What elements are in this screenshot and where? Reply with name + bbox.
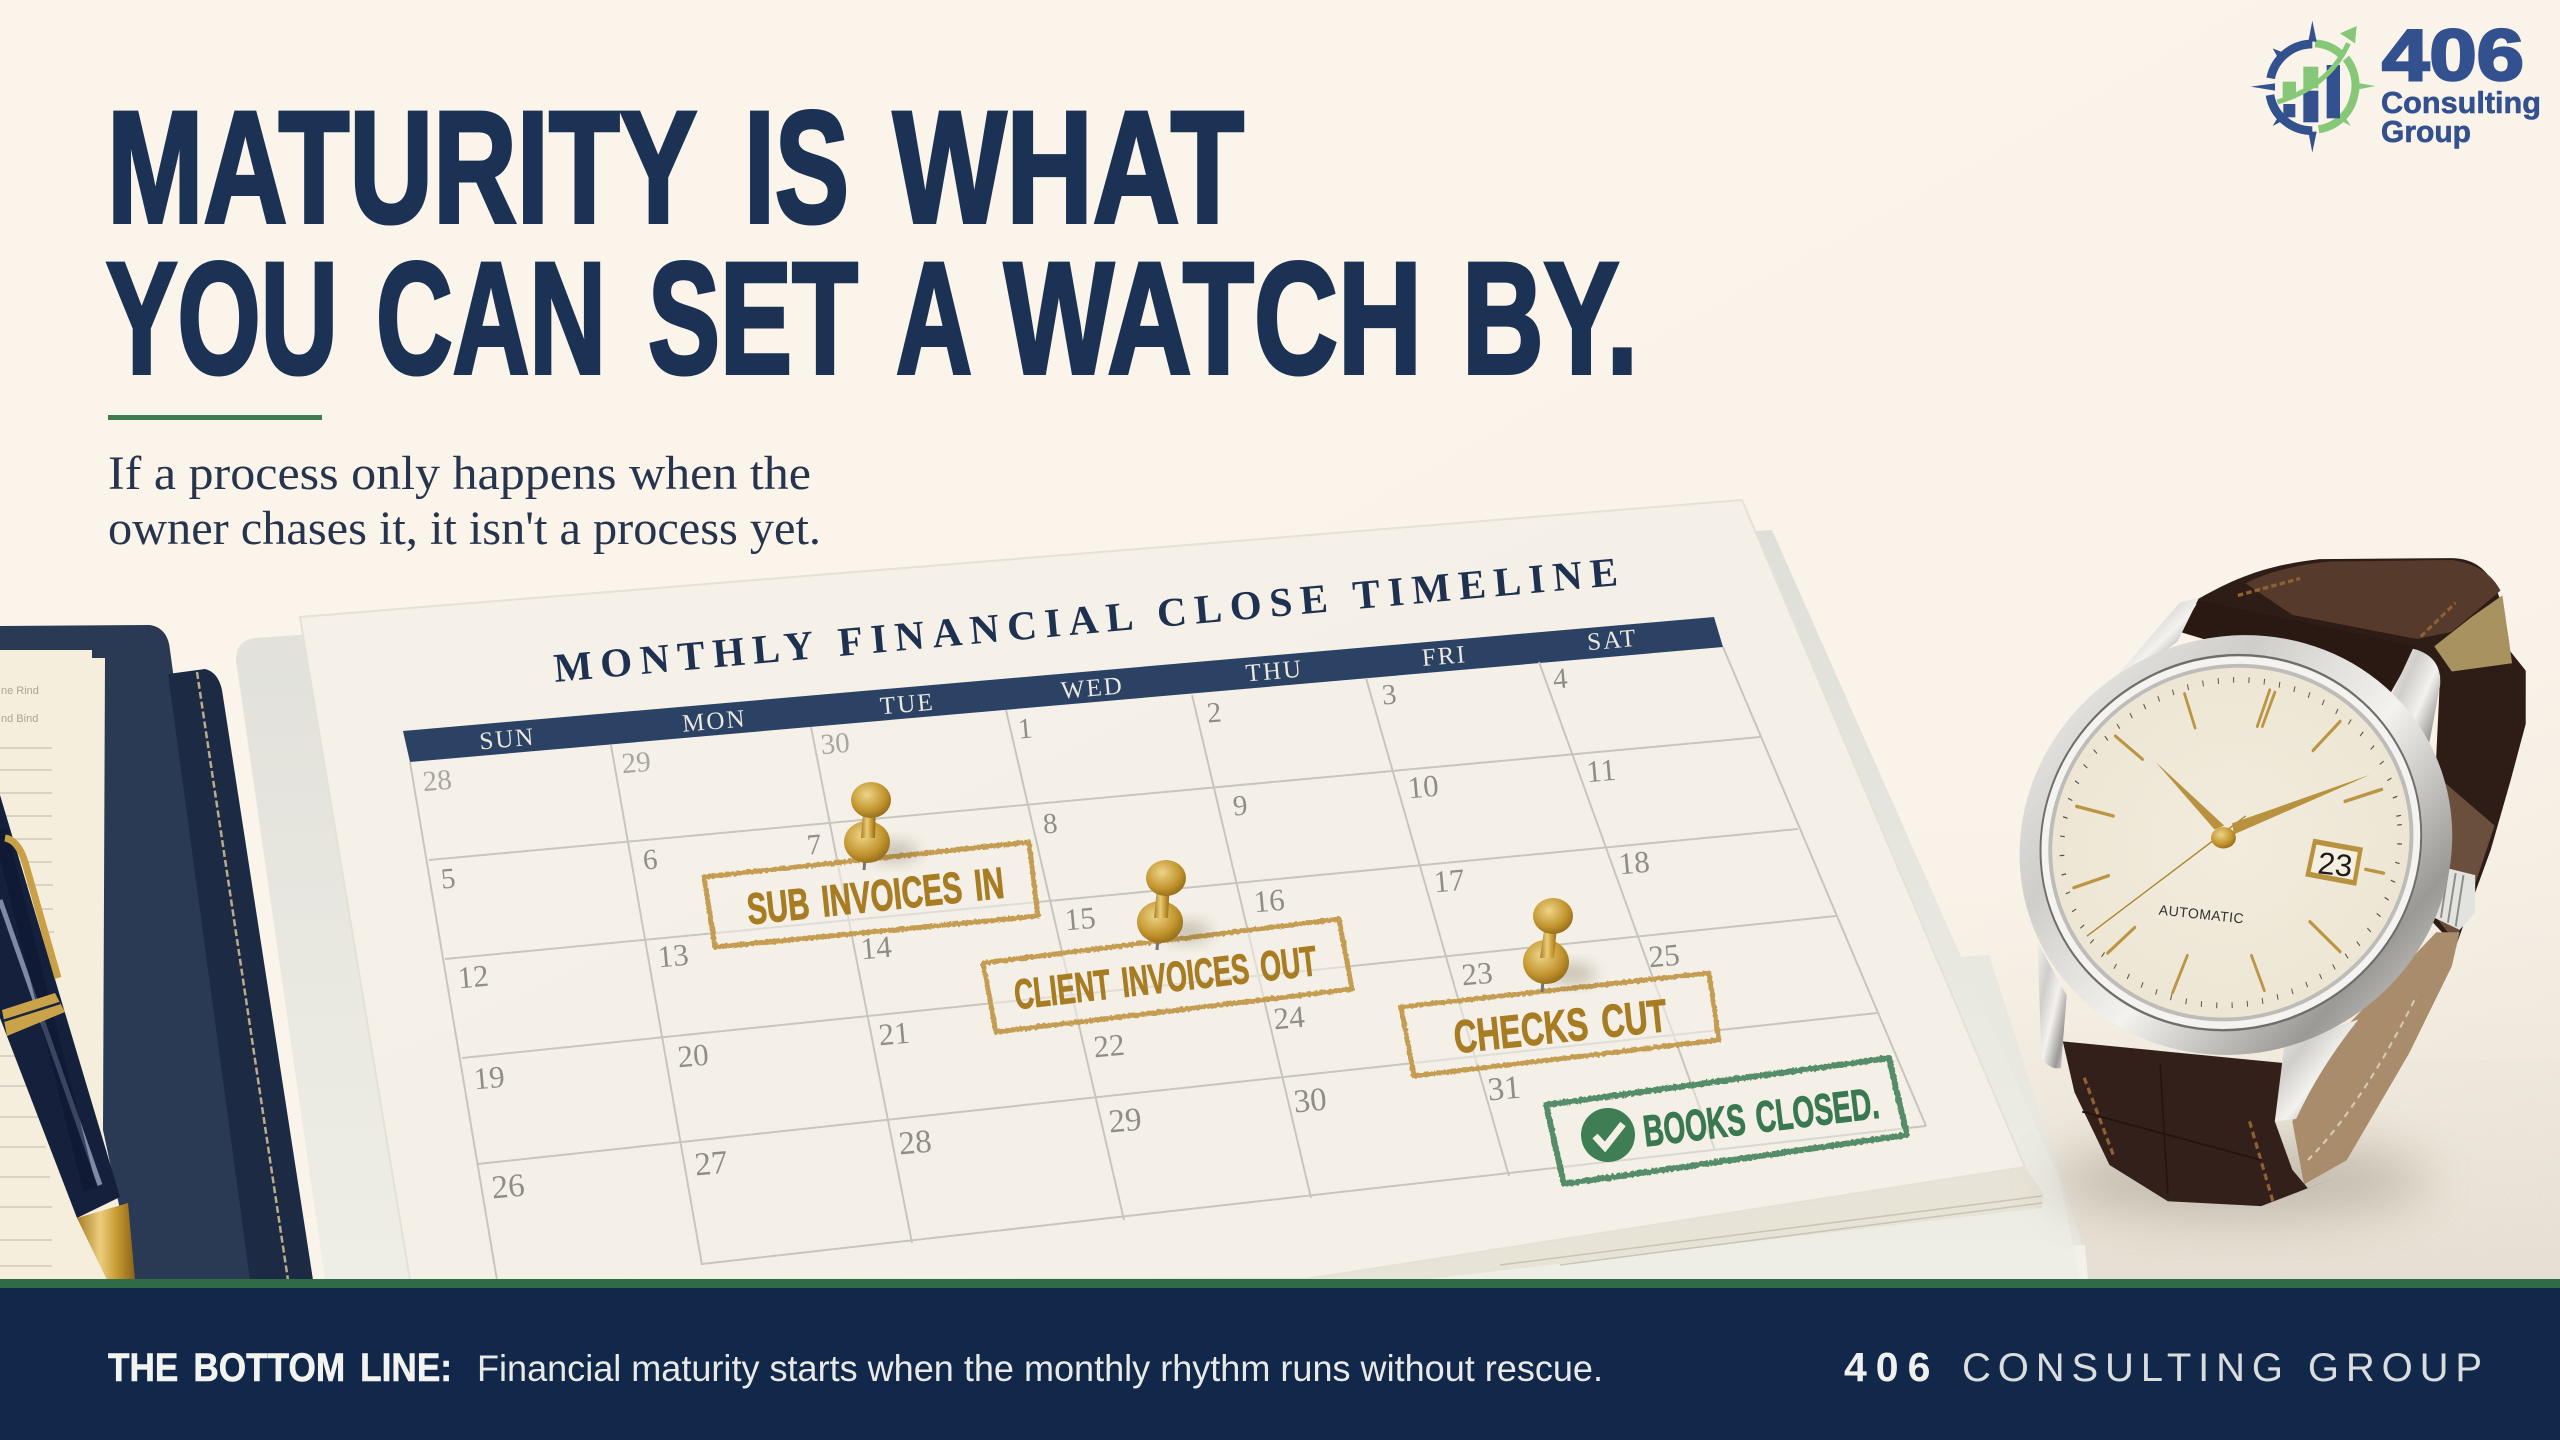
stamp: books closed: BOOKS CLOSED. [1641,1079,1882,1156]
brand footer: 406 [1844,1344,1939,1390]
calendar dates: 4 [1552,662,1569,696]
calendar dates: 31 [1486,1070,1522,1108]
note paper [0,650,135,1280]
logo wordmark: 406 [2382,16,2524,96]
weekday labels: WED [1060,672,1125,705]
watch shadow [2050,1140,2430,1220]
calendar dates: 17 [1432,862,1466,899]
note paper: ne Rind [1,685,39,697]
hour hand [2155,762,2224,830]
notebook cover [0,625,255,1280]
weekday labels: MON [681,705,748,738]
stamp: client invoices out: CLIENT INVOICES OUT [1012,937,1319,1018]
crown [2434,867,2475,930]
calendar dates [421,662,1681,1206]
calendar dates: 3 [1381,678,1398,712]
calendar dates: 10 [1406,768,1440,805]
logo wordmark [2381,16,2541,149]
logo: 406 Consulting Group [2251,16,2541,153]
calendar dates: 16 [1252,882,1286,919]
calendar dates: 24 [1272,999,1307,1036]
calendar dates: 28 [421,764,453,798]
accent rule [108,415,322,420]
subtitle: owner chases it, it isn't a process yet. [108,502,821,555]
weekday labels: TUE [879,689,936,720]
subtitle [108,447,821,555]
calendar dates: 12 [456,958,490,995]
calendar dates: 6 [642,843,659,877]
minute hand [2232,775,2370,834]
calendar dates: 27 [693,1145,729,1183]
calendar sheet [300,500,2025,1280]
hour markers [2074,690,2384,993]
title: SET [648,229,858,407]
calendar dates: 29 [620,746,652,780]
calendar dates: 19 [472,1059,506,1096]
upper strap [2180,558,2526,947]
calendar dates: 23 [1460,955,1494,992]
logo wordmark: Consulting [2381,85,2541,120]
calendar dates: 11 [1585,752,1617,789]
under stack [1300,955,2085,1280]
logo wordmark: Group [2381,114,2471,149]
second hand [2087,816,2246,936]
calendar dates: 26 [490,1168,526,1206]
lower strap [2063,932,2460,1206]
hub [2211,827,2236,848]
brand footer: CONSULTING GROUP [1962,1346,2482,1390]
notebook with pen [0,625,313,1280]
bottom line statement: Financial maturity starts when the monthly rhythm runs without rescue. [477,1348,1603,1389]
weekday labels: SUN [478,724,536,755]
icon: compass with bars and arrow [2251,21,2376,153]
date window [2308,842,2360,883]
lugs [2117,598,2199,675]
calendar dates: 15 [1063,900,1097,937]
table surface [1900,800,2560,1280]
bottom band [0,1279,2560,1440]
stamp: client invoices out [983,919,1352,1032]
calendar dates: 20 [676,1037,710,1074]
stamp: checks cut [1401,973,1719,1076]
calendar dates: 22 [1092,1027,1126,1064]
weekday labels: THU [1245,656,1304,687]
title: MATURITY [107,78,697,256]
calendar dates: 28 [897,1124,933,1162]
calendar dates: 13 [656,937,690,974]
watch body [2005,558,2526,1206]
subtitle: If a process only happens when the [108,447,811,500]
notebook spine strip [168,669,313,1280]
stamp: sub invoices in: SUB INVOICES IN [745,859,1006,934]
pen [0,795,135,1280]
calendar pad [236,500,2088,1280]
stamp: checks cut: CHECKS CUT [1451,989,1669,1063]
calendar dates: 25 [1647,937,1681,974]
case [2005,613,2466,1077]
calendar dates: 9 [1232,789,1249,823]
dial label: AUTOMATIC [2158,902,2245,926]
back sheet [236,530,2080,1280]
calendar dates: 5 [440,862,457,896]
calendar dates: 21 [877,1015,911,1052]
title: YOU [106,229,338,407]
note paper: nd Bind [1,713,38,725]
calendar dates: 7 [806,828,823,862]
calendar dates: 30 [819,727,851,761]
stamp: books closed [1546,1058,1907,1184]
calendar dates: 18 [1617,844,1651,881]
title: A [896,229,972,407]
page edge [1306,1167,2044,1280]
stamp: sub invoices in [704,842,1038,947]
minute ticks [2051,662,2411,1023]
calendar dates: 1 [1017,712,1034,746]
calendar dates: 30 [1292,1082,1328,1120]
weekday header bar [403,617,1723,762]
pin: checks cut [1523,898,1596,992]
stitching [197,672,288,1280]
calendar dates: 14 [859,929,894,966]
pin: sub invoices [844,782,918,870]
title [106,78,1638,407]
title: WATCH [1004,229,1422,407]
calendar dates: 29 [1107,1102,1143,1140]
title: BY. [1462,229,1638,407]
calendar title: MONTHLY FINANCIAL CLOSE TIMELINE [552,548,1619,691]
weekday labels: FRI [1421,641,1468,672]
date number: 23 [2316,845,2354,884]
calendar grid [410,647,1926,1280]
calendar dates: 8 [1042,807,1059,841]
pin: client invoices [1137,860,1211,950]
title: WHAT [893,78,1244,256]
dial [2040,649,2421,1036]
bezel [2028,636,2434,1050]
title: IS [744,78,849,256]
title: CAN [376,229,606,407]
wristwatch [2005,558,2526,1220]
weekday labels: SAT [1586,625,1639,656]
icon: check circle [1581,1108,1635,1162]
bottom line label: THE BOTTOM LINE: [108,1346,452,1390]
calendar dates: 2 [1206,696,1223,730]
weekday labels [478,625,1639,755]
